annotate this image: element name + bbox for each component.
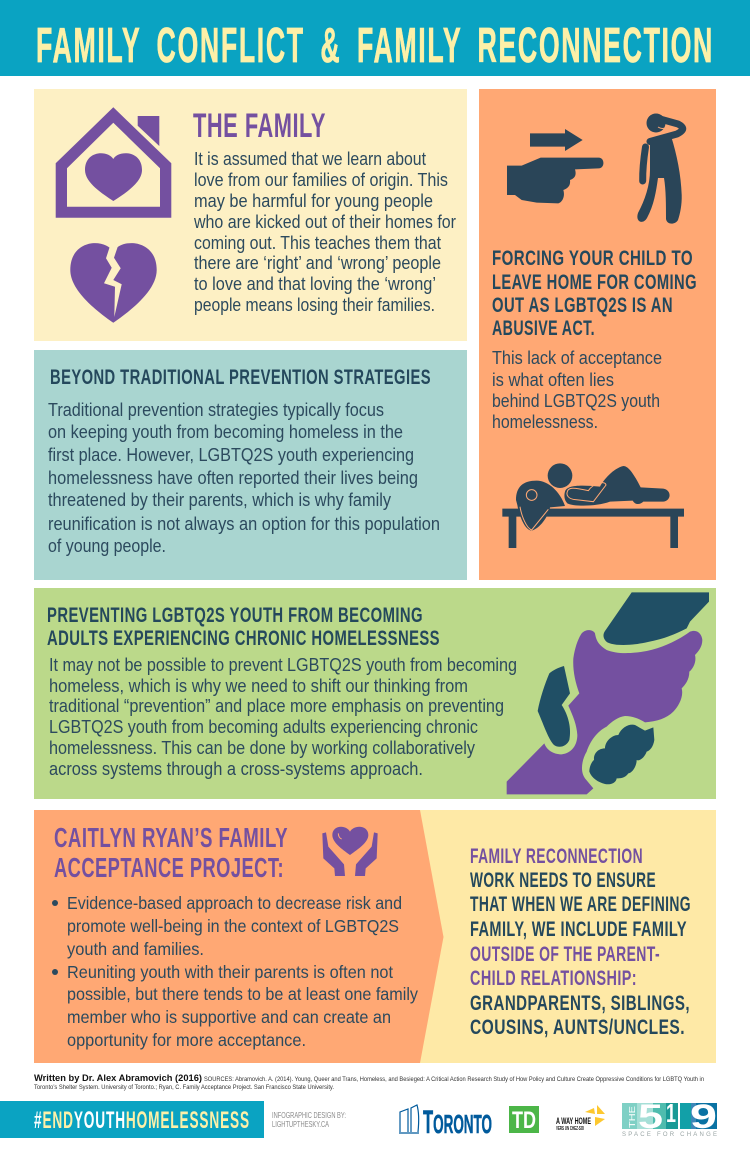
heading: preventing LGBTQ2S youth: ADULTS EXPERIENCING CHRONIC HOMELESSNESS [47, 627, 440, 650]
logo: the 519: 5 [638, 1098, 663, 1136]
panel: preventing chronic homelessness [34, 588, 716, 799]
text: the family body [193, 149, 456, 315]
text: lack of acceptance: This lack of acceptance [492, 348, 662, 368]
list: family acceptance bullets [52, 893, 418, 1050]
text: beyond traditional body: of young people. [48, 536, 166, 556]
logo: A Way Home [556, 1105, 605, 1132]
text: the family body: there are ‘right’ and ‘wrong’ people [194, 253, 441, 273]
credits and sources: Written by Dr. Alex Abramovich (2016) [34, 1073, 202, 1084]
heading: forcing your child: ABUSIVE ACT. [492, 317, 595, 340]
callout: family reconnection: FAMILY RECONNECTION [470, 845, 643, 868]
icon: person lying on bench [502, 463, 684, 548]
heading: preventing LGBTQ2S youth [47, 604, 440, 650]
credits and sources: Toronto’s Shelter System. University of Toronto.; Ryan, C. Family Acceptance Project. San Francisco State University. [34, 1084, 334, 1091]
logo: the 519 [622, 1098, 717, 1138]
list: family acceptance bullets: member who is supportive and can create an [67, 1007, 391, 1027]
text: the family body: It is assumed that we learn about [194, 149, 426, 169]
text: the family body: may be harmful for young people [194, 191, 433, 211]
heading: forcing your child [492, 247, 697, 340]
text: beyond traditional body [48, 400, 440, 556]
heading: forcing your child: OUT AS LGBTQ2S IS AN [492, 294, 673, 317]
text: preventing body: It may not be possible to prevent LGBTQ2S youth from becoming [49, 655, 517, 675]
icon: house with heart [56, 107, 171, 218]
icon: hands holding heart [322, 827, 378, 876]
text: preventing body: LGBTQ2S youth from becoming adults experiencing chronic [49, 717, 478, 737]
panel: the family [34, 89, 467, 341]
text: lack of acceptance: homelessness. [492, 412, 598, 432]
callout: family reconnection: WORK NEEDS TO ENSURE [470, 869, 656, 892]
icon: broken heart [70, 243, 157, 323]
list: family acceptance bullets: opportunity for more acceptance. [67, 1030, 306, 1050]
design credit [272, 1110, 346, 1129]
text: lack of acceptance [492, 348, 662, 432]
text: preventing body [49, 655, 517, 779]
text: preventing body: homelessness. This can be done by working collaboratively [49, 738, 475, 758]
callout: family reconnection [470, 845, 691, 1039]
logo: Toronto: TORONTO [423, 1104, 492, 1140]
heading: family acceptance project: ACCEPTANCE PROJECT: [54, 852, 284, 883]
text: preventing body: traditional “prevention” and place more emphasis on preventing [49, 696, 504, 716]
text: lack of acceptance: behind LGBTQ2S youth [492, 391, 660, 411]
credits and sources [34, 1073, 704, 1091]
text: beyond traditional body: threatened by their parents, which is why family [48, 490, 391, 510]
list: family acceptance bullets: Evidence-based approach to decrease risk and [67, 893, 402, 913]
text: the family body: who are kicked out of their homes for [193, 212, 456, 232]
logo: the 519: 9 [690, 1098, 717, 1136]
heading: family acceptance project [54, 822, 288, 883]
icon: winged foot [507, 592, 709, 794]
heading: preventing LGBTQ2S youth: PREVENTING LGBTQ2S YOUTH FROM BECOMING [47, 604, 423, 627]
text: the family body: to love and that loving the ‘wrong’ [194, 274, 436, 294]
design credit: LIGHTUPTHESKY.CA [272, 1119, 329, 1129]
logo: the 519: 1 [666, 1098, 676, 1128]
design credit: INFOGRAPHIC DESIGN BY: [272, 1110, 346, 1120]
logo: the 519: SPACE FOR CHANGE [622, 1132, 717, 1138]
text: the family body: people means losing their families. [194, 295, 435, 315]
text: lack of acceptance: is what often lies [492, 370, 614, 390]
text: beyond traditional body: on keeping youth from becoming homeless in the [48, 422, 403, 442]
heading: family acceptance project: CAITLYN RYAN’S FAMILY [54, 822, 288, 853]
callout: family reconnection: CHILD RELATIONSHIP: [470, 967, 637, 990]
list: family acceptance bullets: possible, but there tends to be at least one family [67, 984, 418, 1004]
icon: pointing hand with arrow [507, 129, 603, 203]
panel: forcing your child [479, 89, 716, 580]
hashtag banner: #ENDYOUTHHOMELESSNESS [34, 1107, 250, 1134]
text: beyond traditional body: first place. However, LGBTQ2S youth experiencing [48, 445, 414, 465]
logo: A Way Home: A WAY HOME [556, 1116, 591, 1126]
text: preventing body: across systems through a cross-systems approach. [49, 759, 423, 779]
callout: family reconnection: OUTSIDE OF THE PARENT- [470, 943, 660, 966]
text: beyond traditional body: reunification is not always an option for this population [48, 514, 440, 534]
text: beyond traditional body: Traditional prevention strategies typically focus [48, 400, 384, 420]
icon: distressed person [637, 114, 683, 224]
panel: Caitlyn Ryan's family acceptance project [34, 810, 716, 1063]
logo: TD: TD [512, 1107, 536, 1134]
list: family acceptance bullets: youth and families. [67, 939, 204, 959]
panel: beyond traditional prevention strategies [34, 350, 467, 580]
logo: the 519: THE [628, 1106, 637, 1128]
text: the family body: love from our families of origin. This [194, 170, 448, 190]
list: family acceptance bullets: Reuniting youth with their parents is often not [67, 962, 393, 982]
text: the family body: coming out. This teaches them that [194, 233, 441, 253]
text: preventing body: homeless, which is why we need to shift our thinking from [49, 676, 468, 696]
title banner [0, 0, 750, 76]
hashtag banner [0, 1101, 264, 1138]
heading: the family: THE FAMILY [193, 107, 326, 145]
heading: beyond traditional: BEYOND TRADITIONAL PREVENTION STRATEGIES [50, 366, 431, 389]
list: family acceptance bullets: promote well-being in the context of LGBTQ2S [67, 916, 399, 936]
logo: Toronto [399, 1104, 492, 1140]
text: beyond traditional body: homelessness have often reported their lives being [48, 468, 418, 488]
logo: A Way Home: VERS UN CHEZ-SOI [556, 1126, 584, 1132]
